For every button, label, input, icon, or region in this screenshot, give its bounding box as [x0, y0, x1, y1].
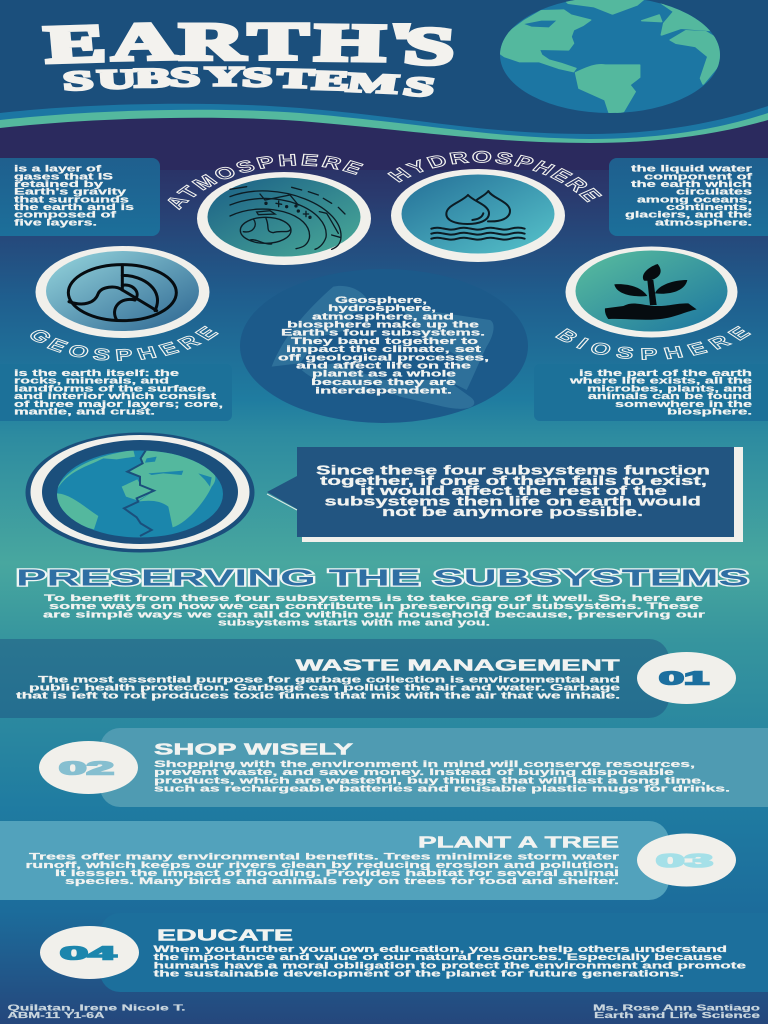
panel: geosphere definition: and interior which consist [14, 391, 216, 401]
footer: teacher credit: Ms. Rose Ann Santiago [593, 1002, 760, 1012]
body text: Trees offer many environmental benefits. Trees minimize storm water [29, 852, 620, 862]
callout: together, if one of them fails to exist, [320, 473, 707, 488]
panel: geosphere definition [0, 364, 232, 421]
body text: humans have a moral obligation to protect the environment and promote [154, 960, 746, 970]
text block: preserving intro: subsystems starts with me and you. [218, 617, 490, 627]
heading: EDUCATE [157, 928, 293, 944]
text block: preserving intro: some ways on how we can contribute in preserving our subsystems. These [49, 601, 699, 611]
panel: atmosphere definition: the earth and is [14, 202, 134, 212]
text block: preserving intro: are simple ways we can all do within our household because, preserving our [43, 609, 706, 619]
footer: student credit [8, 1002, 186, 1020]
panel: biosphere definition: biosphere. [667, 407, 752, 417]
body text [26, 852, 620, 886]
panel: biosphere definition: is the part of the earth [579, 368, 752, 378]
body text: runoff, which keeps our rivers clean by reducing erosion and pollution. [26, 860, 619, 870]
body text: public health protection. Garbage can pollute the air and water. Garbage [29, 682, 620, 692]
panel: central summary: Earth's four subsystems. [281, 328, 485, 338]
panel: plant a tree [0, 821, 736, 900]
panel: atmosphere definition: five layers. [14, 217, 97, 227]
panel: atmosphere definition [0, 158, 160, 236]
panel: central summary: They band together to [291, 336, 479, 346]
body text: The most essential purpose for garbage collection is environmental and [38, 674, 620, 684]
panel: atmosphere definition: gases that IS [14, 171, 113, 181]
panel: biosphere definition: microbes, plants, and [587, 384, 752, 394]
number badge 02 [39, 741, 138, 794]
panel: hydrosphere definition: glaciers, and the [625, 210, 752, 220]
body text: that is left to rot produces toxic fumes that mix with the air that we inhale. [16, 690, 620, 700]
heading: biosphere: BIOSPHERE [554, 326, 752, 360]
number badge 02: 02 [59, 758, 114, 778]
panel: central summary: and affect life on the [296, 360, 471, 370]
title: SUBSYSTEMS [62, 62, 438, 103]
body text [16, 674, 620, 700]
callout: it would affect the rest of the [360, 483, 667, 498]
body text: species. Many birds and animals rely on trees for food and shelter. [65, 876, 619, 886]
heading: atmosphere: ATMOSPHERE [167, 154, 364, 210]
title: EARTH'S [43, 11, 457, 76]
panel: central summary: planet as a whole [312, 369, 456, 379]
body text: the sustainable development of the planet for future generations. [154, 968, 684, 978]
panel: biosphere definition: somewhere in the [615, 399, 752, 409]
number badge 03 [637, 834, 736, 886]
panel: atmosphere definition: that surrounds [14, 194, 129, 204]
icon: biosphere [566, 246, 738, 338]
heading: SHOP WISELY [154, 742, 354, 758]
callout: Since these four subsystems function [316, 462, 710, 478]
panel: educate [40, 913, 768, 992]
panel: central summary: Geosphere, [335, 295, 427, 305]
panel: atmosphere definition: retained by [14, 179, 103, 189]
panel: hydrosphere definition [609, 158, 768, 236]
number badge 01 [637, 652, 736, 704]
panel: biosphere definition: animals can be found [588, 391, 752, 401]
heading: preserving the subsystems: PRESERVING THE SUBSYSTEMS [16, 564, 749, 590]
panel: atmosphere definition: is a layer of [14, 164, 103, 174]
number badge 01: 01 [659, 668, 709, 688]
heading: PLANT A TREE [418, 834, 619, 852]
panel: biosphere definition: where life exists, all the [568, 376, 752, 386]
body text [154, 944, 746, 978]
panel: hydrosphere definition: component of [644, 171, 754, 181]
body text: such as rechargeable batteries and reusable plastic mugs for drinks. [154, 784, 730, 794]
footer: student credit: Quilatan, Irene Nicole T. [8, 1002, 186, 1012]
panel: geosphere definition: mantle, and crust. [14, 407, 155, 417]
panel: geosphere definition: of three major layers; core, [14, 399, 223, 409]
body text: the importance and value of our natural resources. Especially because [154, 952, 722, 962]
panel: waste management [0, 639, 736, 718]
body text: When you further your own education, you can help others understand [154, 944, 727, 954]
panel: hydrosphere definition: continents, [666, 202, 752, 212]
icon: hydrosphere [391, 169, 565, 262]
body text: prevent waste, and save money. Instead of buying disposable [154, 767, 674, 777]
heading: geosphere: GEOSPHERE [30, 326, 219, 362]
body text: products, which are wasteful, buy things that will last a long time, [154, 776, 706, 786]
panel: central summary: off geological processes, [278, 352, 489, 362]
text block: preserving intro [43, 593, 706, 627]
panel: geosphere definition: rocks, minerals, and [14, 376, 169, 386]
text block: preserving intro: To benefit from these four subsystems is to take care of it well. So, here are [44, 593, 703, 603]
icon: geosphere [36, 246, 210, 338]
callout: subsystems then life on earth would [324, 494, 701, 508]
icon: recycling arrows [272, 286, 494, 409]
panel: hydrosphere definition: the earth which [631, 179, 752, 189]
number badge 04 [40, 926, 139, 979]
panel: central summary: biosphere make up the [287, 319, 479, 329]
panel: central summary [240, 269, 528, 423]
number badge 03: 03 [656, 851, 713, 871]
panel: biosphere definition [534, 364, 768, 421]
body text: It lessen the impact of flooding. Provides habitat for several animal [55, 868, 619, 878]
heading: hydrosphere: HYDROSPHERE [387, 150, 602, 202]
icon: cracked earth [26, 432, 254, 552]
number badge 04: 04 [60, 944, 116, 964]
panel: geosphere definition: landforms of the surface [14, 384, 206, 394]
panel: hydrosphere definition: atmosphere. [655, 217, 752, 227]
heading: WASTE MANAGEMENT [296, 658, 621, 674]
panel: hydrosphere definition: among oceans, [637, 194, 752, 204]
panel: central summary: impact the climate, set [286, 344, 481, 354]
panel: hydrosphere definition: circulates [676, 187, 752, 197]
footer: teacher credit: Earth and Life Science [594, 1010, 760, 1020]
panel: geosphere definition: is the earth itself: the [14, 368, 179, 378]
panel: central summary: interdependent. [315, 385, 452, 395]
icon: atmosphere [197, 172, 371, 265]
panel: central summary: hydrosphere, [328, 303, 436, 313]
panel: central summary: because they are [311, 377, 456, 387]
panel: atmosphere definition: Earth's gravity [14, 187, 126, 197]
panel: atmosphere definition: composed of [14, 210, 118, 220]
panel: central summary: atmosphere, and [312, 311, 454, 321]
panel: shop wisely [39, 728, 768, 807]
icon: earth globe [497, 0, 725, 115]
body text: Shopping with the environment in mind will conserve resources, [154, 759, 695, 769]
callout [267, 447, 743, 542]
panel: hydrosphere definition: the liquid water [631, 164, 753, 174]
callout: not be anymore possible. [382, 504, 643, 519]
body text [154, 759, 730, 794]
footer: student credit: ABM-11 Y1-6A [8, 1010, 104, 1020]
header band [0, 0, 768, 170]
footer: teacher credit [593, 1002, 760, 1020]
